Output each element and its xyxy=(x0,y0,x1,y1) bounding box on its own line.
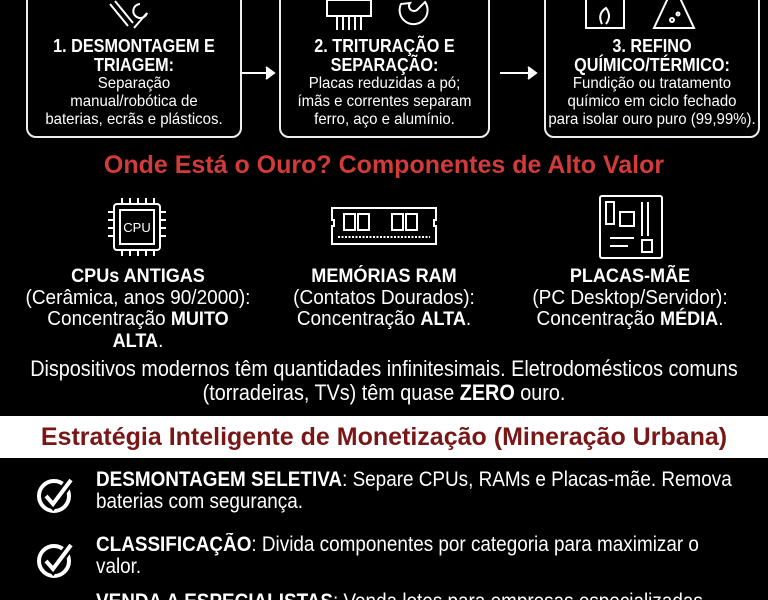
step 2 text: SEPARAÇÃO: xyxy=(331,55,438,75)
step 2 text: ímãs e correntes separam xyxy=(298,93,471,110)
column: CPUs: CPUs ANTIGAS xyxy=(71,266,205,287)
step 3 text: 3. REFINO xyxy=(612,36,692,56)
note paragraph xyxy=(30,356,738,405)
checklist item 2: valor. xyxy=(96,555,141,578)
column: RAM: Concentração ALTA. xyxy=(297,308,471,330)
icon: check xyxy=(37,478,72,513)
column: motherboards: (PC Desktop/Servidor): xyxy=(532,286,728,308)
column: CPUs: (Cerâmica, anos 90/2000): xyxy=(26,286,250,308)
panel: step 2 xyxy=(279,0,490,138)
checklist item 2: CLASSIFICAÇÃO: Divida componentes por categoria para maximizar o xyxy=(96,533,699,556)
arrow 2 xyxy=(500,66,538,80)
icon: shredder and magnet xyxy=(326,0,429,30)
column: motherboards: Concentração MÉDIA. xyxy=(536,308,724,330)
step 1 text: manual/robótica de xyxy=(70,93,198,110)
icon: RAM xyxy=(331,207,437,245)
arrow 1 xyxy=(240,66,276,80)
step 2 text: 2. TRITURAÇÃO E xyxy=(314,36,455,56)
banner: strategy heading: Estratégia Inteligente de Monetização (Mineração Urbana) xyxy=(41,423,727,451)
step 2 text xyxy=(298,36,471,128)
icon: CPU: CPU xyxy=(123,220,151,235)
column: CPUs xyxy=(26,266,250,352)
column: motherboards: PLACAS-MÃE xyxy=(570,266,690,287)
column: CPUs: ALTA. xyxy=(113,330,163,352)
step 3 text xyxy=(548,36,756,128)
checklist item 1: DESMONTAGEM SELETIVA: Separe CPUs, RAMs e Placas-mãe. Remova xyxy=(96,468,732,491)
panel: step 1 xyxy=(26,0,242,138)
step 1 text: 1. DESMONTAGEM E xyxy=(53,36,215,56)
panel: step 3 xyxy=(544,0,760,138)
heading: where is the gold: Onde Está o Ouro? Componentes de Alto Valor xyxy=(104,151,664,179)
column: RAM xyxy=(293,265,475,330)
icon: furnace and flask xyxy=(585,0,696,29)
icon: motherboard xyxy=(599,195,663,259)
checklist item 1: baterias com segurança. xyxy=(96,490,303,513)
step 1 text: Separação xyxy=(98,75,170,92)
column: CPUs: Concentração MUITO xyxy=(47,308,229,330)
icon: check xyxy=(37,544,72,578)
column: motherboards xyxy=(532,265,728,330)
note paragraph: (torradeiras, TVs) têm quase ZERO ouro. xyxy=(203,380,565,405)
step 3 text: Fundição ou tratamento xyxy=(573,75,731,92)
step 3 text: para isolar ouro puro (99,99%). xyxy=(548,111,756,128)
step 2 text: ferro, aço e alumínio. xyxy=(314,111,455,128)
column: RAM: (Contatos Dourados): xyxy=(293,286,475,308)
banner: strategy heading xyxy=(0,416,768,458)
column: RAM: MEMÓRIAS RAM xyxy=(311,266,457,287)
step 1 text: TRIAGEM: xyxy=(94,55,174,75)
icon: tools xyxy=(109,0,148,29)
checklist item 2 xyxy=(37,533,699,578)
note paragraph: Dispositivos modernos têm quantidades infinitesimais. Eletrodomésticos comuns xyxy=(30,356,738,381)
step 1 text xyxy=(45,36,223,128)
step 3 text: químico em ciclo fechado xyxy=(568,93,736,110)
icon: check xyxy=(36,596,76,600)
step 1 text: baterias, ecrãs e plásticos. xyxy=(45,111,223,128)
step 2 text: Placas reduzidas a pó; xyxy=(309,75,460,92)
checklist item 1 xyxy=(37,468,732,513)
icon: CPU xyxy=(108,198,166,256)
step 3 text: QUÍMICO/TÉRMICO: xyxy=(574,55,730,75)
